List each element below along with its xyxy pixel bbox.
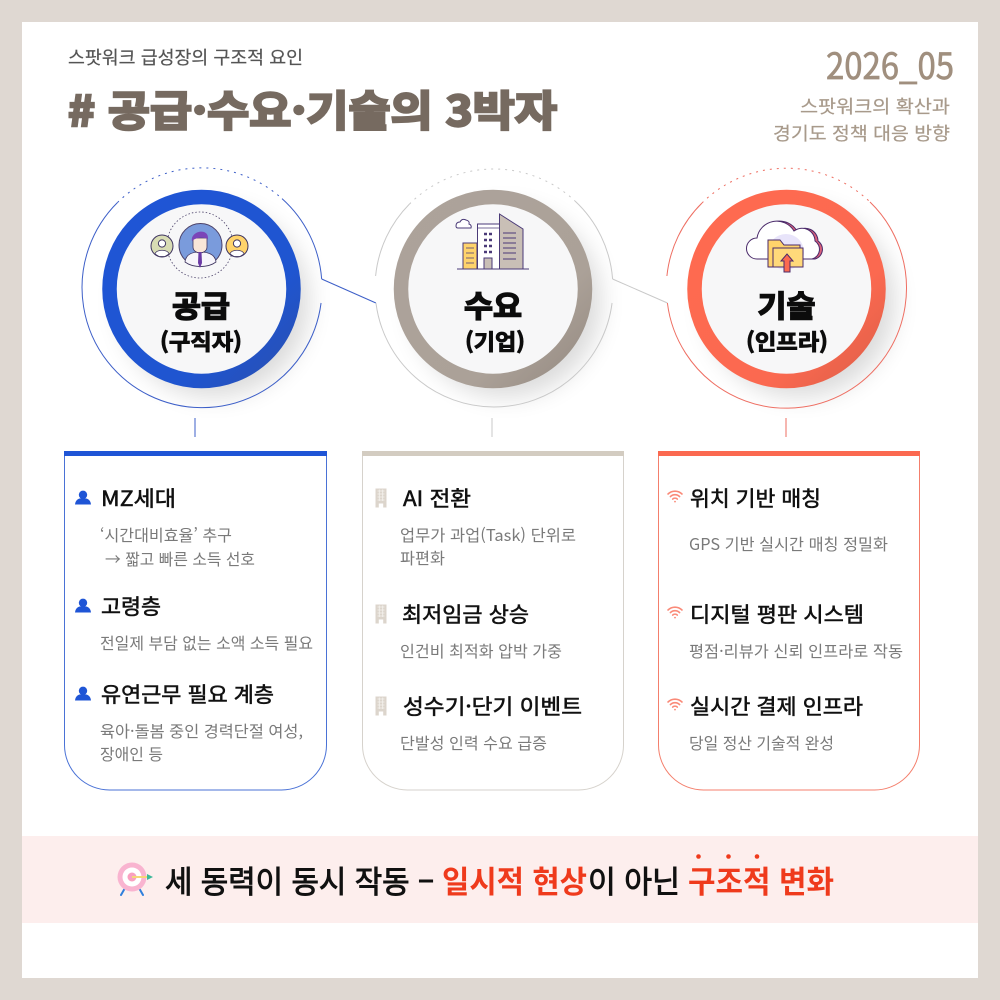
item: minimum wage: 최저임금 상승 [402,599,529,629]
item: flexible workers: 유연근무 필요 계층 [101,679,274,709]
item: real-time payment: 당일 정산 기술적 완성 [689,730,834,754]
item: real-time payment [668,691,863,754]
icon: cloud folder [746,221,822,272]
item: seniors [75,591,313,654]
item: reputation system: 평점·리뷰가 신뢰 인프라로 작동 [689,638,903,662]
icon: target [118,862,153,895]
item: flexible workers: 장애인 등 [100,741,163,765]
panel: demand card [362,451,624,790]
banner message: 일시적 현상 [442,857,587,902]
item: peak season [376,691,582,754]
icon: people [151,212,248,278]
item: location matching: GPS 기반 실시간 매칭 정밀화 [689,531,888,555]
item: seniors: 고령층 [101,591,161,621]
report title [773,93,950,146]
item: location matching [668,483,888,555]
icon: buildings [456,214,529,269]
label: supply: 공급 [172,282,230,326]
banner message: 세 동력이 동시 작동 – [165,857,434,902]
issue number: 2026_05 [826,38,954,90]
banner message: 구조적 변화 [688,857,834,902]
label: demand: 수요 [464,282,522,326]
banner message [165,857,834,902]
sublabel: infrastructure: (인프라) [746,325,828,357]
item: AI transition: 파편화 [400,545,445,569]
item: AI transition [376,483,576,569]
subtitle: 스팟워크 급성장의 구조적 요인 [68,44,303,70]
connector ticks [195,418,786,437]
banner message: 이 아닌 [588,857,680,902]
item: MZ generation: → 짧고 빠른 소득 선호 [105,546,255,570]
label: technology: 기술 [758,282,816,326]
item: flexible workers: 육아·돌봄 중인 경력단절 여성, [100,718,303,742]
item: minimum wage: 인건비 최적화 압박 가중 [400,638,562,662]
sublabel: companies: (기업) [465,325,525,357]
item: MZ generation: MZ세대 [101,483,176,513]
item: peak season: 성수기·단기 이벤트 [403,691,582,721]
item: AI transition: AI 전환 [403,483,471,513]
sublabel: job seekers: (구직자) [160,325,242,357]
item: reputation system [668,599,903,662]
item: MZ generation: ‘시간대비효율’ 추구 [100,522,232,546]
title: # 공급·수요·기술의 3박자 [68,78,557,139]
circle: demand [376,169,667,407]
report title: 스팟워크의 확산과 [800,93,950,119]
circle: technology [667,168,906,408]
item: AI transition: 업무가 과업(Task) 단위로 [400,522,576,546]
item: location matching: 위치 기반 매칭 [690,483,821,513]
panel: technology card [658,451,920,790]
item: flexible workers [75,679,303,765]
emphasis dots [696,854,759,859]
item: peak season: 단발성 인력 수요 급증 [400,730,547,754]
item: reputation system: 디지털 평판 시스템 [690,599,864,629]
item: seniors: 전일제 부담 없는 소액 소득 필요 [100,630,313,654]
report title: 경기도 정책 대응 방향 [773,120,950,146]
item: minimum wage [376,599,562,662]
circle: supply [82,168,376,408]
item: real-time payment: 실시간 결제 인프라 [690,691,863,721]
banner [22,836,978,923]
item: MZ generation [75,483,255,570]
panel: supply card [64,451,327,790]
